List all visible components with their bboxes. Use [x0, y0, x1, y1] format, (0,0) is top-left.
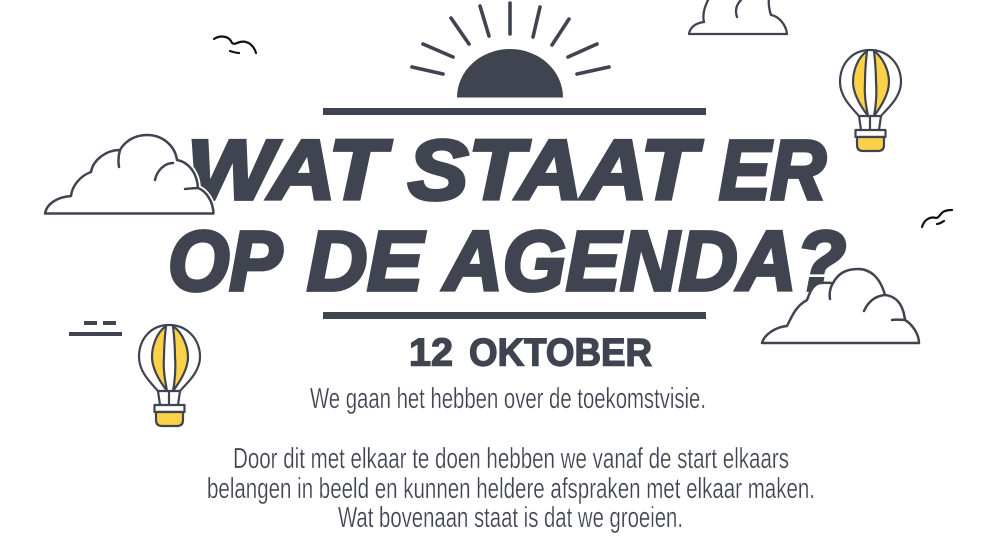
title line 1: ER: [719, 123, 826, 217]
date heading: 12: [409, 332, 453, 374]
title line 1: WAT: [187, 123, 392, 217]
top divider bar: [323, 108, 706, 115]
icon: bird right: [922, 210, 952, 227]
body paragraph: [207, 443, 815, 534]
decorative dashes left: [69, 321, 122, 336]
icon: hot air balloon left: [139, 325, 200, 426]
body paragraph: Door dit met elkaar te doen hebben we vanaf de start elkaars: [233, 443, 789, 475]
intro sentence: We gaan het hebben over de toekomstvisie.: [310, 383, 706, 415]
date heading: OKTOBER: [469, 332, 652, 374]
icon: bird top left: [214, 37, 256, 53]
body paragraph: Wat bovenaan staat is dat we groeien.: [338, 502, 683, 534]
bottom divider bar: [323, 312, 706, 319]
icon: cloud lower right: [762, 269, 919, 343]
title line 2: OP: [168, 214, 283, 308]
title line 1: [187, 123, 826, 217]
icon: rising sun: [412, 3, 609, 98]
title line 2: AGENDA?: [442, 214, 846, 308]
icon: cloud left: [45, 135, 214, 214]
icon: hot air balloon right: [840, 50, 901, 151]
title: [168, 123, 846, 308]
icon: cloud top right: [689, 0, 787, 34]
title line 1: STAAT: [408, 123, 703, 217]
title line 2: [168, 214, 846, 308]
title line 2: DE: [307, 214, 426, 308]
